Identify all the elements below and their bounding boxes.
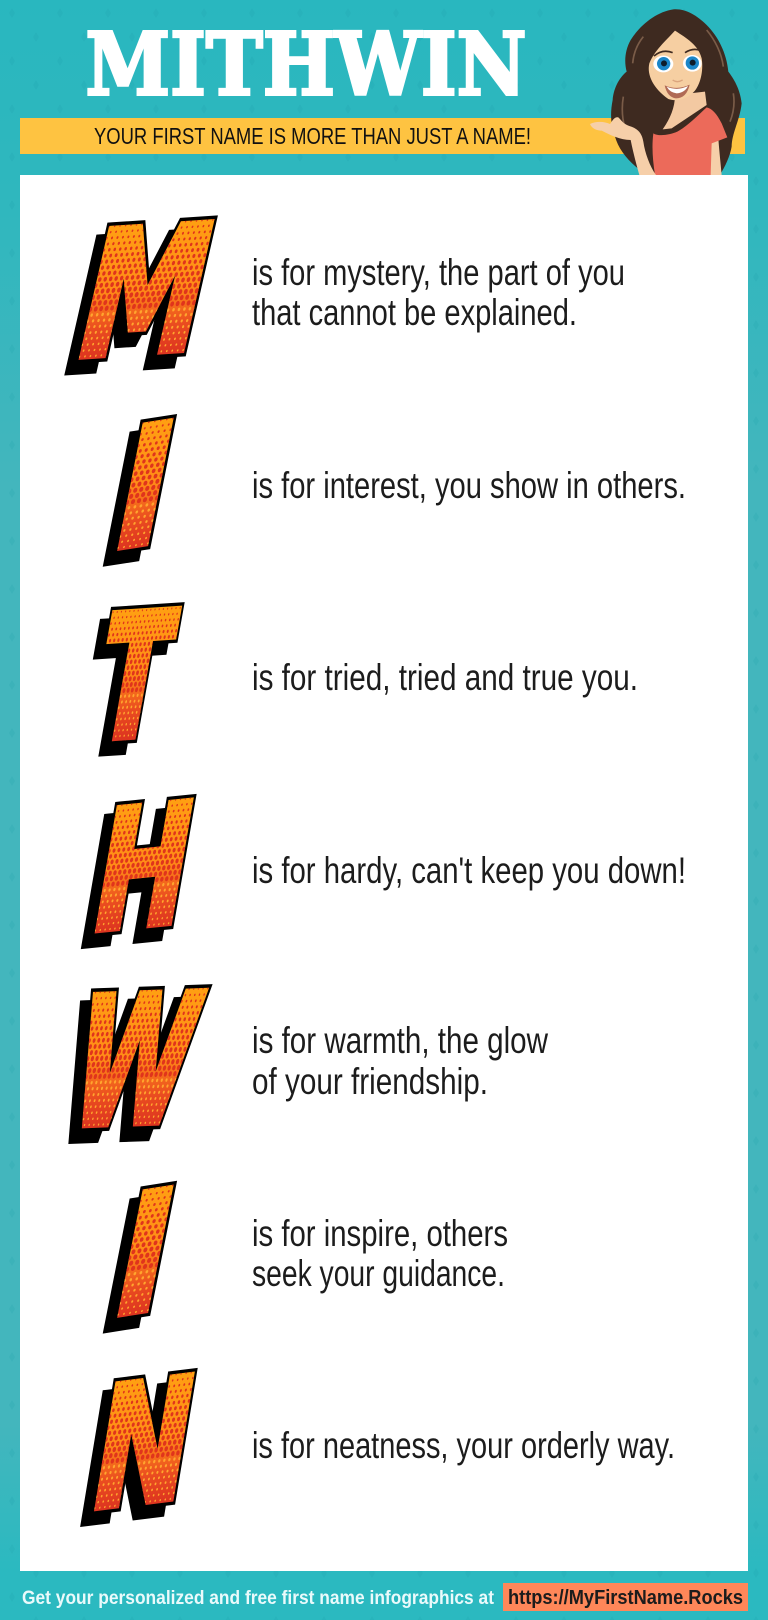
M description: that cannot be explained. (252, 292, 577, 333)
big letter I (second): I (100, 1153, 190, 1356)
big letter I: I (100, 386, 190, 589)
big letter I (second): I (100, 1153, 190, 1356)
big letter W (68, 984, 213, 1144)
big letter M (64, 215, 218, 376)
W description: of your friendship. (252, 1061, 488, 1102)
big letter M: M (61, 188, 231, 399)
M description (252, 252, 625, 333)
big letter I (102, 414, 178, 567)
big letter H: H (80, 767, 207, 971)
W description: is for warmth, the glow (252, 1020, 548, 1061)
second I description (252, 1213, 508, 1294)
big letter I (second) (102, 1180, 178, 1334)
big letter N: N (80, 1341, 208, 1550)
footer (22, 1583, 748, 1611)
footer call to action: Get your personalized and free first name infographics at (22, 1588, 495, 1609)
big letter T: T (85, 578, 185, 778)
illustration: woman presenting with open hand (590, 9, 742, 175)
big letter T: T (85, 578, 185, 778)
big letter I: I (100, 386, 190, 589)
footer url badge: https://MyFirstName.Rocks (508, 1587, 743, 1609)
tagline text: YOUR FIRST NAME IS MORE THAN JUST A NAME! (94, 123, 531, 149)
M description: is for mystery, the part of you (252, 252, 625, 293)
T description: is for tried, tried and true you. (252, 657, 638, 698)
title: MITHWIN: MITHWIN (86, 14, 526, 116)
big letter W: W (53, 957, 217, 1168)
second I description: seek your guidance. (252, 1253, 505, 1294)
yellow tagline banner (20, 118, 745, 154)
big letter W: W (53, 957, 217, 1168)
big letter H: H (80, 767, 207, 971)
big letter N: N (80, 1341, 208, 1550)
W description (252, 1020, 548, 1102)
second I description: is for inspire, others (252, 1213, 508, 1254)
big letter M: M (61, 188, 231, 399)
